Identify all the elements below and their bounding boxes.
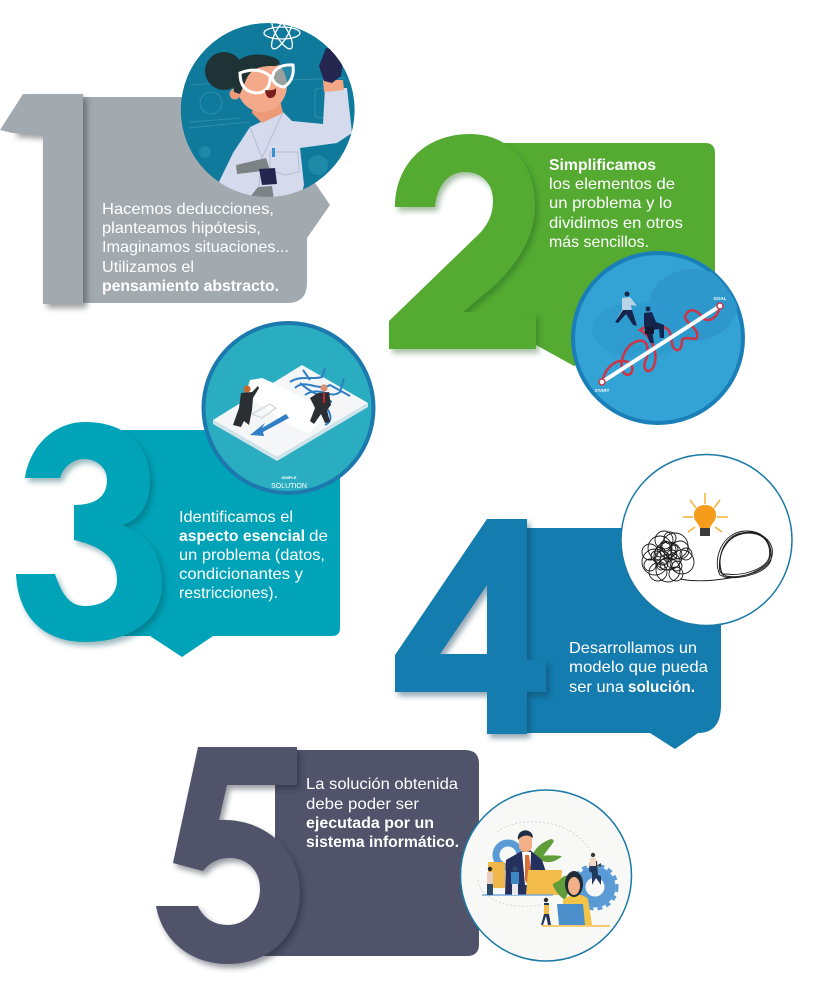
step 4	[395, 454, 792, 749]
text: step 1	[102, 201, 289, 295]
neck	[252, 102, 283, 123]
icon: tangle and light bulb	[621, 454, 792, 626]
text: step 2: un problema y lo	[549, 195, 672, 212]
hair bun	[205, 52, 243, 90]
step 3	[16, 323, 374, 657]
text: step 3: condicionantes y	[179, 566, 303, 583]
text: step 4: ser una	[569, 679, 624, 696]
text: step 1: Hacemos deducciones,	[102, 201, 274, 218]
text: step 4: Desarrollamos un	[569, 640, 697, 657]
text: step 3: Identificamos el	[179, 509, 293, 526]
text: step 2: más sencillos.	[549, 234, 649, 251]
atom	[263, 23, 301, 50]
glasses	[240, 65, 293, 93]
text: step 1: planteamos hipótesis,	[102, 220, 261, 237]
text: step 3: restricciones).	[179, 585, 278, 602]
icon: scientist	[181, 14, 355, 200]
numeral 3	[16, 422, 162, 642]
text: step 2: los elementos de	[549, 176, 675, 193]
text: step 5: sistema informático.	[306, 834, 459, 851]
text: step 4: solución.	[628, 679, 695, 696]
text: step 3	[179, 509, 328, 602]
numeral 4	[395, 519, 546, 734]
text: step 5	[306, 776, 459, 851]
icon: rolling out a simple solution: SOLUTION	[271, 483, 307, 490]
text: step 2	[549, 157, 683, 251]
text: step 1: Imaginamos situaciones...	[102, 239, 289, 256]
text: step 5: debe poder ser	[306, 796, 420, 813]
numeral 1	[0, 94, 83, 304]
icon: team with gears	[460, 790, 632, 961]
text: step 5: La solución obtenida	[306, 776, 458, 793]
panel: step 3	[120, 430, 340, 657]
drill	[236, 158, 270, 174]
numeral 2	[389, 134, 536, 349]
text: step 3: un problema (datos,	[179, 547, 325, 564]
panel: step 1	[83, 97, 330, 303]
text: step 4: modelo que pueda	[569, 659, 708, 676]
numeral 2 shadow	[392, 138, 539, 353]
text: step 4	[569, 640, 708, 696]
text: step 5: ejecutada por un	[306, 815, 434, 832]
text: step 1: pensamiento abstracto.	[102, 278, 279, 295]
panel: step 2	[450, 143, 715, 366]
step 5	[156, 747, 632, 968]
icon: runners on a path: GOAL	[714, 296, 727, 301]
icon: runners on a path	[573, 253, 743, 423]
text: step 2: Simplificamos	[549, 157, 656, 174]
icon: rolling out a simple solution: SIMPLE	[282, 475, 297, 480]
panel: step 4	[500, 528, 721, 749]
step 2	[389, 134, 743, 423]
hand raised	[323, 80, 344, 92]
numeral 3 shadow	[19, 426, 165, 646]
head	[240, 64, 287, 112]
numeral 4 shadow	[398, 523, 549, 738]
text: step 2: dividimos en otros	[549, 215, 683, 232]
text: step 3: de	[309, 528, 328, 545]
text: step 3: aspecto esencial	[179, 528, 305, 545]
numeral 5 shadow	[159, 751, 303, 968]
coat	[215, 88, 352, 200]
panel: step 5	[248, 750, 479, 956]
step 1	[0, 14, 355, 308]
icon: rolling out a simple solution	[204, 323, 374, 493]
numeral 1 shadow	[16, 98, 87, 308]
text: step 1: Utilizamos el	[102, 259, 194, 276]
icon: runners on a path: START	[595, 388, 610, 393]
numeral 5	[156, 747, 300, 964]
